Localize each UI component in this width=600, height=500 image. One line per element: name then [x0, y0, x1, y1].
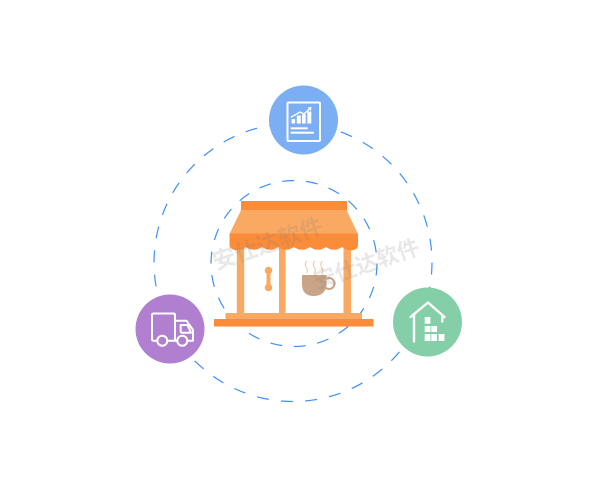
trend arrow	[291, 108, 310, 117]
shop base floor	[214, 319, 374, 326]
cab	[175, 321, 193, 341]
awning slope	[230, 210, 358, 234]
awning top bar	[241, 201, 347, 210]
truck outline	[152, 314, 193, 346]
arrow head	[308, 107, 312, 111]
text lines	[291, 127, 314, 134]
icon: storefront	[214, 201, 374, 326]
left wall	[413, 314, 415, 342]
icon: delivery truck on purple circle	[136, 294, 204, 364]
shop base step	[226, 313, 362, 320]
right wall stub	[441, 316, 443, 322]
cup body	[302, 275, 326, 296]
watermark left: 安仕达软件	[209, 213, 326, 275]
rear wheel	[157, 336, 167, 346]
axle link	[175, 340, 177, 342]
awning scalloped valance	[230, 234, 358, 250]
house outline	[410, 302, 444, 342]
icon: report chart on blue circle	[269, 86, 338, 154]
stacked blocks	[425, 317, 444, 341]
blue circle	[269, 86, 338, 154]
steam	[305, 261, 323, 273]
icon: house with blocks on green circle	[393, 288, 462, 356]
watermark right: 安仕达软件	[310, 234, 423, 294]
roof	[410, 302, 444, 317]
inner dashed orbit ring	[211, 180, 377, 346]
document frame	[288, 102, 320, 141]
front wheel	[177, 336, 187, 346]
cargo box	[152, 314, 175, 341]
cab window	[181, 325, 191, 333]
purple circle	[136, 294, 204, 364]
outer dashed orbit ring	[154, 124, 432, 402]
bars	[292, 112, 311, 124]
door handle	[265, 267, 272, 291]
green circle	[393, 288, 462, 356]
icon: coffee cup	[302, 261, 334, 296]
shop posts	[237, 248, 351, 314]
cup handle	[324, 278, 334, 289]
